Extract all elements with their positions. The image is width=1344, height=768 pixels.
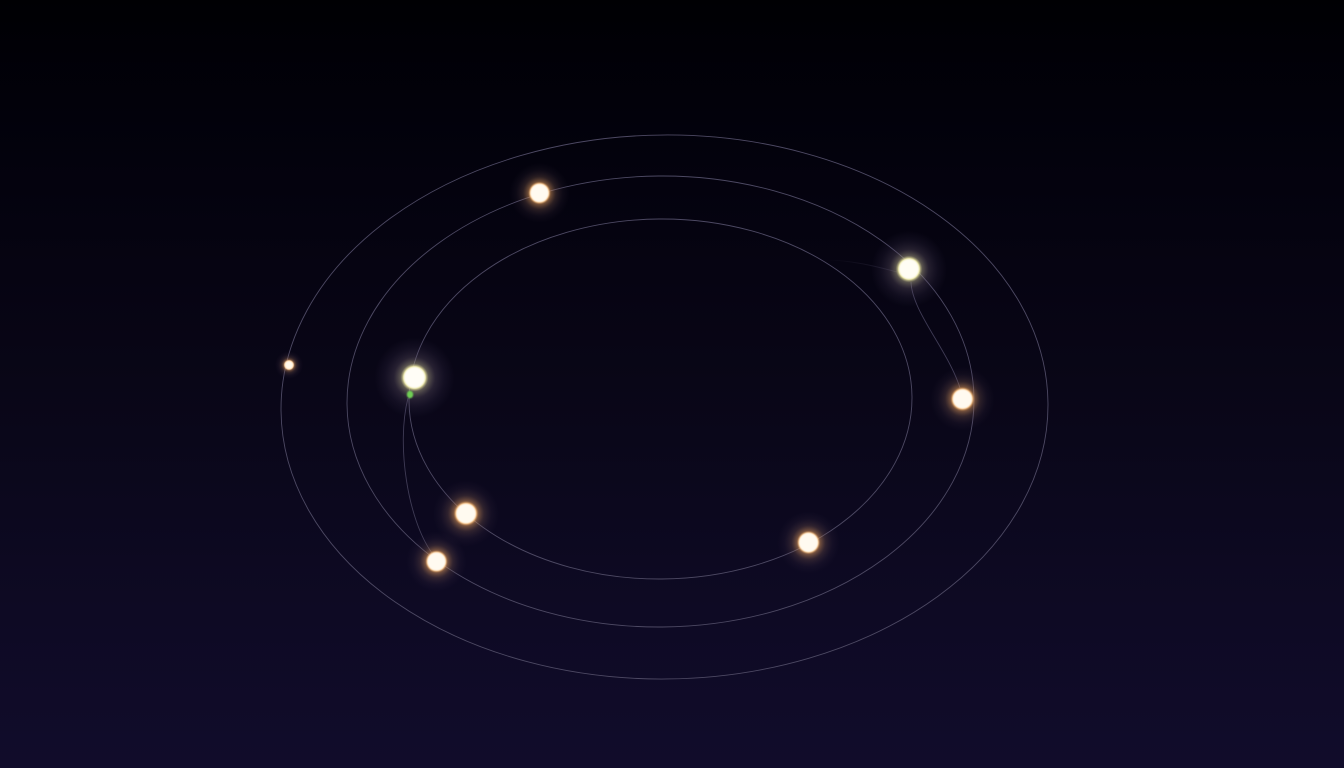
outer orbit: [278, 131, 1051, 683]
star: upper right bright: [871, 231, 947, 307]
star: lower left outer: [406, 532, 466, 592]
inner orbit: [407, 217, 914, 581]
transfer paths: [403, 260, 960, 553]
star: far left small: [275, 351, 303, 379]
orbit rings: [278, 131, 1051, 683]
path: left transfer arc: [403, 398, 432, 553]
star: right: [930, 367, 994, 431]
star: lower left inner: [433, 480, 499, 546]
path: faint arc near upper right node: [825, 260, 897, 272]
star: left bright: [374, 338, 454, 418]
path: right transfer arc: [911, 282, 960, 388]
star: lower right: [778, 512, 840, 574]
middle orbit: [345, 173, 976, 630]
marker: green dot: [407, 391, 413, 398]
star: top: [510, 163, 570, 223]
